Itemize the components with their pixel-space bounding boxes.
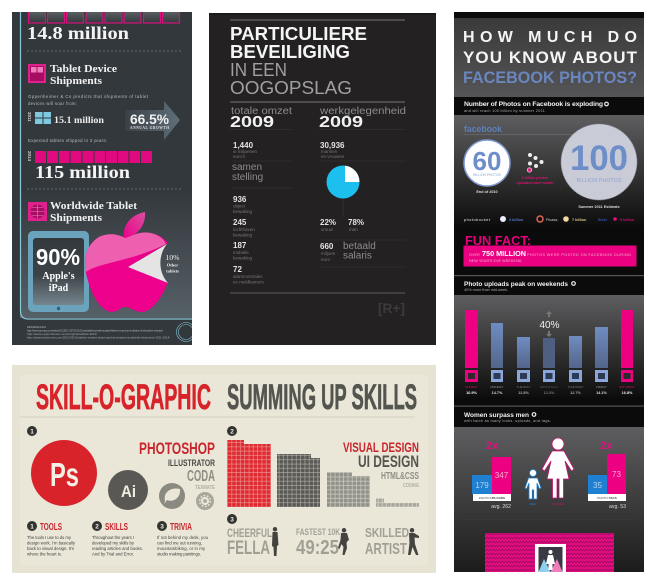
references: [27, 326, 170, 339]
circle: 100 billion: 100: [570, 139, 628, 178]
icon: circle badge: [176, 322, 192, 342]
gender percentages: 78%: [348, 218, 364, 227]
column: tools: 1: [30, 524, 34, 530]
tools ranked list: ILLUSTRATOR: [168, 458, 215, 469]
chart: 60 to 100 billion photos: Summer 2011 Estimate: [578, 205, 620, 209]
title: PARTICULIERE: [230, 24, 367, 44]
references: http://www.oppenheimer.com/insights/tablets-2011/: [27, 332, 97, 336]
turnover list: 187: [233, 241, 247, 250]
icon: Coda leaf: [159, 483, 185, 509]
panel: particuliere beveiliging: [209, 13, 436, 345]
badge: 3: [227, 514, 237, 524]
iPad graphic: 90%: 90%: [36, 244, 80, 270]
heading: worldwide tablet shipments: Shipments: [50, 213, 102, 224]
turnover list: stelling: [232, 172, 263, 183]
callout: fun fact: 750 MILLION: [482, 251, 526, 258]
column head: totale omzet: [230, 106, 292, 131]
employment figure: [320, 141, 345, 159]
skills ranked list: [343, 439, 419, 489]
trivia: cheerful fella: [227, 526, 278, 559]
column: skills: And by Trial and Error.: [92, 552, 134, 556]
dots: 6 billion per month: [516, 153, 554, 185]
figure: 15.1 million: 15.1 million: [54, 115, 104, 125]
arrow: annual growth: 66.5%: [130, 111, 170, 127]
section head: weekend uploads: [464, 281, 575, 292]
column head: werkgelegenheid: 2009: [319, 114, 363, 131]
label: 2011: 2011: [27, 112, 32, 122]
references: http://www.pcmag.com/article2/0,2817,2375123,00.asp/tablet-growth-analyst-failure-to-spot-as-indicator-of-disruptive-change/: [27, 328, 163, 332]
icon: Photoshop: Ps: [50, 456, 79, 493]
badge: 2: 2: [230, 428, 234, 436]
pie chart: gender split: [326, 166, 360, 217]
weekday values: 14.1%: [596, 391, 607, 395]
tools ranked list: CODA: [187, 468, 215, 485]
legend: other photo services: 7 billion: [572, 218, 587, 222]
title: summing up skills: SUMMING UP SKILLS: [227, 378, 417, 417]
employment figure: 30,936: [320, 141, 345, 150]
text: Oppenheimer forecast: Oppenheimer & Co predicts that shipments of tablet: [28, 94, 149, 99]
column head: totale omzet: 2009: [230, 114, 274, 131]
iPad graphic: 90%: [28, 231, 89, 312]
title: IN EEN: [230, 60, 287, 80]
gender percentages: 22%: [320, 218, 336, 227]
section head: weekend uploads: 40% more than mid-week.: [464, 288, 508, 292]
iPad graphic: 90%: Apple's: [42, 271, 75, 282]
label: 10% other tablets: Other: [167, 262, 178, 268]
icon: gear: [196, 492, 214, 510]
gender percentages: vrouw: [321, 227, 334, 232]
weekday values: 12.7%: [570, 391, 581, 395]
column: trivia: 3: [160, 524, 164, 530]
legend: other photo services: flickr: [598, 218, 608, 222]
employment figure: mannen: [321, 149, 338, 154]
paid salaries: miljoen: [321, 251, 336, 256]
chart: photo uploads: PHOTO UPLOADS: [479, 496, 505, 500]
turnover list: bewaking: [233, 209, 253, 214]
turnover list: bewaking: [233, 232, 253, 238]
chart: photo tags: [588, 440, 626, 510]
arrow: annual growth: [125, 101, 180, 140]
column: skills: Throughout the years I: [92, 535, 134, 540]
weekday labels: FRIDAY: [596, 385, 607, 389]
tools ranked list: TEXMATE: [195, 485, 215, 491]
trivia: fastest 10K: FASTEST 10K: [296, 527, 340, 537]
label: 10% other tablets: tablets: [166, 268, 179, 274]
pink pattern with photo frame: [485, 533, 614, 572]
turnover list: 245: [233, 218, 247, 227]
trivia: fastest 10K: 49:25: [296, 537, 339, 559]
weekday labels: TUESDAY: [517, 385, 530, 389]
chart: photo uploads: 2x: [486, 440, 499, 452]
label: 2014: 2014: [27, 151, 32, 162]
chart: photo tags: 35: [593, 481, 602, 490]
skills ranked list: UI DESIGN: [358, 452, 419, 471]
callout: fun fact: PHOTOS WERE POSTED ON FACEBOOK DURING: [527, 253, 631, 257]
panel: facebook photos: [454, 12, 644, 572]
icon: Illustrator: [108, 470, 148, 510]
weekday labels: WEDNESDAY: [539, 385, 559, 389]
title: HOW MUCH DO: [463, 29, 637, 46]
paid salaries: 660: [320, 242, 334, 251]
callout: 40%: 40%: [539, 320, 560, 331]
legend: other photo services: [464, 216, 635, 222]
turnover list: object: [233, 204, 246, 208]
pink tablet row: [35, 151, 152, 163]
turnover list: en meldkamers: [233, 280, 265, 284]
section head: women surpass men: [464, 412, 551, 423]
column: skills: [92, 521, 143, 556]
weekday values: [466, 391, 633, 395]
icon: Illustrator: Ai: [121, 482, 136, 501]
column: tools: [27, 521, 76, 556]
label: 10% other tablets: 10%: [166, 253, 179, 262]
weekday values: 12.3%: [544, 391, 555, 395]
heading: tablet device shipments: Shipments: [50, 76, 102, 87]
chart: 60 to 100 billion photos: [454, 115, 644, 225]
title: BEVEILIGING: [230, 42, 350, 62]
callout: fun fact: [463, 233, 637, 267]
column: trivia: [157, 521, 209, 556]
top pink squares: [28, 12, 180, 24]
heading: worldwide tablet shipments: [50, 201, 138, 224]
trivia: cheerful fella: FELLA: [227, 538, 270, 559]
icon: globe: [28, 202, 47, 221]
chart: skill block bars: [227, 440, 419, 507]
chart: photo uploads: 347: [495, 471, 509, 480]
tools ranked list: PHOTOSHOP: [139, 439, 215, 458]
circle: 100 billion: BILLION PHOTOS: [577, 178, 622, 184]
callout: fun fact: NEW YEAR'S EVE WEEKEND.: [469, 259, 522, 263]
chart: photo uploads: [472, 440, 511, 510]
circle: 60 billion: [464, 140, 510, 186]
badge: 1: 1: [30, 428, 34, 436]
icon: woman: WOMEN: [552, 502, 564, 506]
title: skill-o-graphic: SKILL-O-GRAPHIC: [36, 378, 211, 417]
column: tools: back to visual design. It's: [27, 546, 74, 551]
weekday values: 16.9%: [466, 391, 477, 395]
turnover list: bewaking: [233, 256, 253, 260]
skills ranked list: CODING: [403, 483, 419, 489]
turnover list: 1,440: [233, 141, 254, 150]
figure: 14.8 million: 14.8 million: [27, 23, 129, 43]
icon: blue tablet grid: [35, 112, 51, 124]
section head: photos exploding: Number of Photos on Facebook is exploding: [464, 101, 603, 108]
employment figure: en vrouwen: [321, 154, 345, 159]
column: tools: The tools I use to do my: [27, 535, 72, 540]
turnover list: samen: [232, 162, 262, 173]
chart: photo tags: 2x: [600, 440, 613, 452]
heading: tablet device shipments: Tablet Device: [50, 64, 118, 75]
callout: 40%: [539, 311, 560, 337]
figure: 115 million: 115 million: [35, 162, 130, 182]
gender percentages: [320, 218, 364, 232]
text: expected tablets: Expected tablets shipped in 3 years:: [28, 138, 107, 143]
badge: 1: [27, 426, 37, 436]
panel: tablet shipments: [12, 9, 196, 345]
icon: Photoshop: [31, 440, 97, 506]
arrow: annual growth: ANNUAL GROWTH: [130, 126, 169, 130]
title: YOU KNOW ABOUT: [463, 48, 638, 67]
weekday icons: [465, 370, 633, 382]
circle: 60 billion: BILLION PHOTOS: [473, 173, 502, 177]
paid salaries: euro: [321, 257, 331, 262]
apple pie chart: [85, 212, 168, 312]
bar chart: uploads by weekday: [454, 295, 644, 397]
trivia: fastest 10K: [296, 527, 349, 559]
section head: photos exploding: and will reach 100 billion by summer 2011.: [464, 109, 546, 113]
chart: photo uploads: avg. 262: [491, 504, 511, 510]
column: tools: TOOLS: [40, 522, 62, 533]
title: [454, 18, 644, 97]
title: OOGOPSLAG: [230, 78, 352, 98]
trivia: skilled artist: SKILLED: [365, 525, 409, 540]
label: 10% other tablets: [166, 255, 180, 272]
callout: fun fact: OVER: [469, 253, 480, 257]
chart: photo uploads: 179: [475, 481, 489, 490]
references: REFERENCES: [27, 325, 46, 329]
legend: other photo services: photobucket: [464, 218, 491, 222]
references: http://www.techcrunch.com/2011/03/21/tablets-market-share-ipad-dominates-worldwide-shipments-2011-2014/: [27, 336, 170, 340]
column head: werkgelegenheid: [319, 106, 406, 131]
iPad graphic: 90%: iPad: [49, 283, 69, 294]
title: [230, 24, 367, 98]
column: skills: reading articles and books.: [92, 546, 143, 551]
icon: tablet device: [28, 64, 46, 83]
dots: 6 billion per month: 6 billion photos: [522, 176, 548, 180]
section head: weekend uploads: Photo uploads peak on weekends: [464, 281, 568, 288]
paid salaries: betaald: [343, 241, 376, 252]
weekday labels: MONDAY: [491, 385, 503, 389]
weekday labels: [465, 385, 635, 389]
paid salaries: [320, 241, 376, 262]
trivia: skilled artist: ARTIST: [365, 541, 407, 558]
tools ranked list: [139, 439, 215, 491]
trivia: cheerful fella: CHEERFUL: [227, 526, 272, 540]
text: Oppenheimer forecast: devices will soar from:: [28, 101, 77, 106]
column head: totale omzet: totale omzet: [231, 106, 292, 117]
callout: fun fact: FUN FACT:: [465, 233, 531, 248]
column: trivia: studio making paintings.: [157, 552, 201, 556]
logo: R+: [R+]: [378, 300, 405, 316]
column: tools: design work. I'm basically: [27, 540, 76, 546]
heading: tablet device shipments: [50, 64, 118, 87]
weekday labels: SUNDAY: [465, 385, 478, 389]
weekday labels: SATURDAY: [619, 385, 635, 389]
column: skills: SKILLS: [105, 522, 128, 533]
turnover list: euro's: [233, 154, 246, 159]
gender percentages: man: [349, 227, 358, 232]
turnover list: in miljoenen: [233, 149, 258, 154]
skills ranked list: VISUAL DESIGN: [343, 439, 419, 455]
panel: skill-o-graphic: [12, 365, 436, 573]
section head: photos exploding: [464, 101, 608, 113]
column: trivia: mountainbiking, or in my: [157, 546, 206, 551]
section head: women surpass men: Women surpass men: [464, 412, 529, 419]
icon: man: [525, 470, 541, 506]
icon: man: MEN: [530, 502, 536, 506]
turnover list: alarmcentrales: [233, 274, 263, 279]
icon: woman: [542, 438, 574, 506]
chart: 60 to 100 billion photos: facebook: [464, 124, 503, 135]
trivia: skilled artist: [365, 525, 419, 558]
weekday labels: THURSDAY: [567, 385, 584, 389]
legend: other photo services: 4 billion: [509, 218, 524, 222]
legend: other photo services: Picasa.: [546, 218, 558, 222]
section head: women surpass men: with twice as many looks, uploads, and tags.: [464, 419, 551, 423]
chart: photo tags: 73: [612, 470, 621, 479]
weekday values: 16.8%: [622, 391, 633, 395]
chart: photo tags: avg. 53: [609, 504, 626, 510]
chart: photo tags: PHOTO TAGS: [597, 496, 617, 500]
badge: 2: [227, 426, 237, 436]
circle: 100 billion: [561, 124, 637, 200]
column: skills: 2: [95, 524, 99, 530]
legend: other photo services: 5 billion: [620, 218, 635, 222]
weekday values: 12.8%: [518, 391, 529, 395]
circle: 60 billion: 60: [473, 146, 501, 176]
text: Oppenheimer forecast: [28, 94, 148, 105]
turnover list: mobiele: [233, 250, 249, 255]
paid salaries: salaris: [343, 250, 372, 262]
column: skills: developed my skills by: [92, 540, 135, 546]
column: trivia: TRIVIA: [170, 522, 192, 533]
badge: 3: 3: [230, 516, 234, 524]
dots: 6 billion per month: uploaded each month: [516, 181, 554, 185]
weekday values: 14.7%: [492, 391, 503, 395]
column head: werkgelegenheid: werkgelegenheid: [319, 106, 406, 117]
column: tools: where the heart is.: [27, 552, 62, 556]
skills ranked list: HTML&CSS: [381, 471, 419, 482]
title: FACEBOOK PHOTOS?: [463, 68, 637, 87]
column: trivia: can find me out running,: [157, 540, 202, 546]
chart: 60 to 100 billion photos: End of 2010: [476, 190, 498, 194]
turnover list: 72: [233, 265, 242, 274]
turnover list: [232, 141, 265, 284]
column: trivia: If not behind my desk, you: [157, 535, 209, 540]
turnover list: 936: [233, 195, 247, 204]
turnover list: luchthaven: [233, 227, 255, 232]
heading: worldwide tablet shipments: Worldwide Tablet: [50, 201, 138, 212]
